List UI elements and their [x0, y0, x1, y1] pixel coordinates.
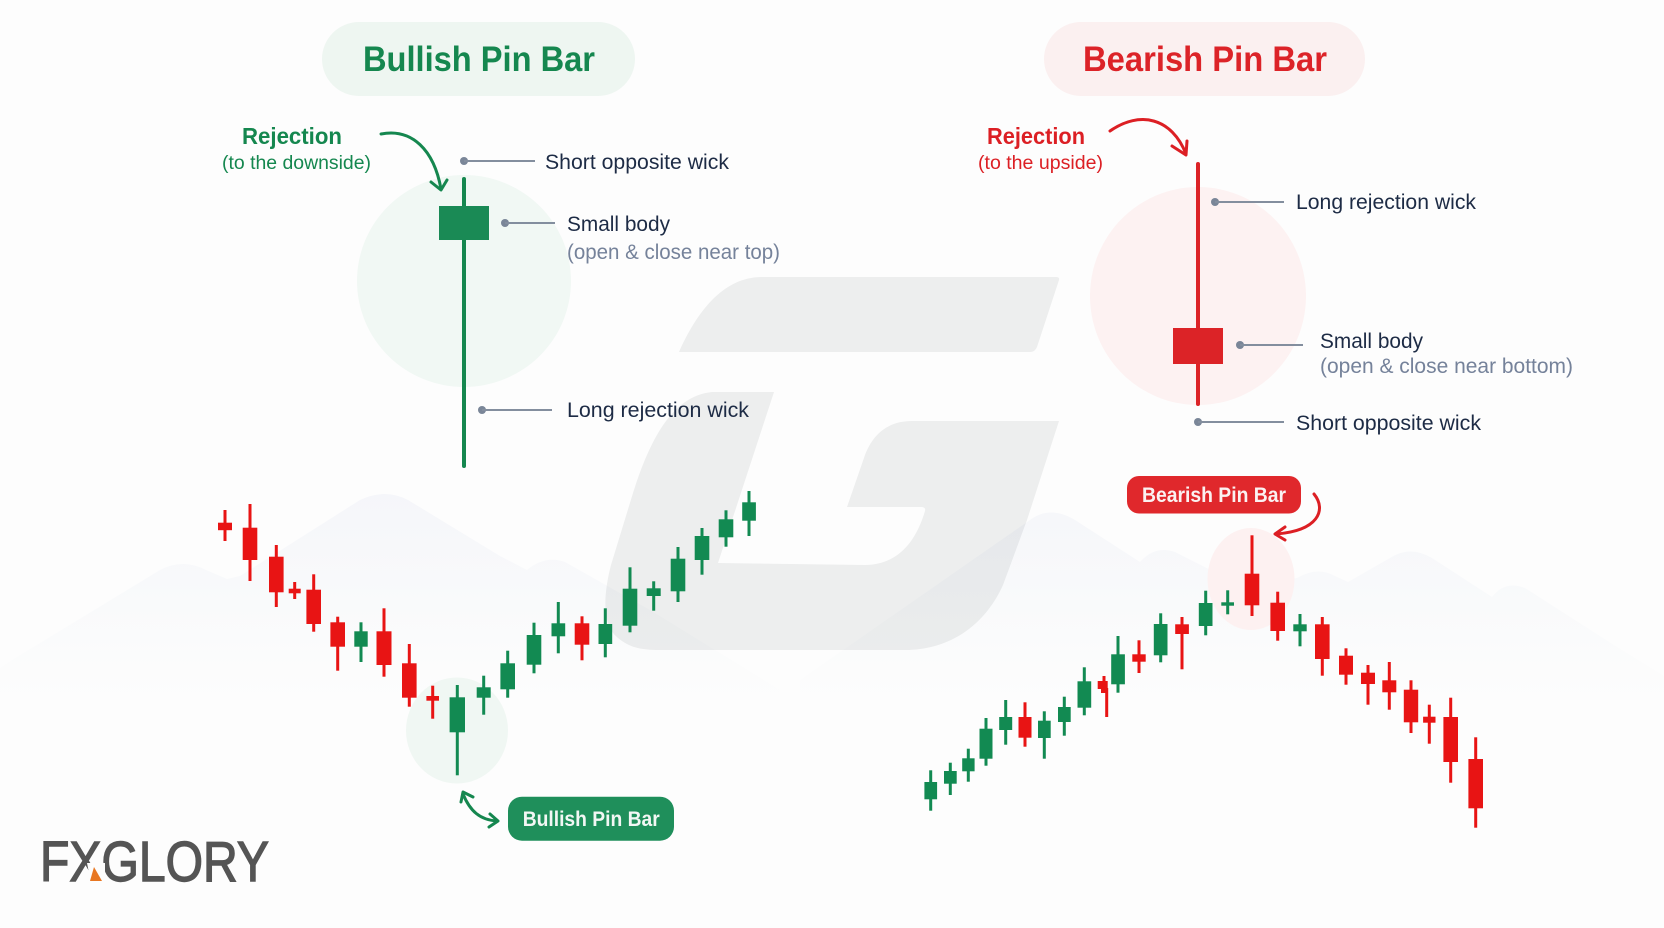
callout: long rejection wick: Long rejection wick: [567, 399, 750, 422]
candle: [924, 770, 937, 811]
candle: [1293, 614, 1307, 646]
rejection label: Rejection: [987, 123, 1085, 149]
candle: [477, 676, 491, 715]
candle: [1154, 613, 1168, 662]
chart: bearish reversal candlesticks: [924, 528, 1483, 828]
candle: [1339, 648, 1353, 685]
callout: small body: Small body: [567, 213, 670, 236]
candle: [376, 608, 392, 677]
candle: [330, 617, 345, 671]
candle: [1175, 617, 1189, 669]
rejection label: (to the upside): [978, 153, 1103, 174]
callout: short opposite wick: Short opposite wick: [545, 151, 730, 174]
candle: [1018, 702, 1032, 747]
logo: FXGLORY: FXGLORY: [40, 830, 269, 894]
candle: [1038, 711, 1051, 759]
rejection label: (to the downside): [222, 153, 371, 174]
rejection label: Rejection: [242, 123, 342, 149]
callout: small body: [1236, 330, 1573, 378]
callout: short opposite wick: Short opposite wick: [1296, 412, 1482, 435]
candle: [1468, 737, 1483, 828]
candle: [575, 616, 589, 660]
candle: [1058, 697, 1071, 736]
candle: [1315, 617, 1330, 676]
candle: [623, 567, 637, 632]
rejection label: [222, 123, 371, 174]
candle: [944, 763, 957, 795]
label: Bullish Pin Bar: [508, 797, 674, 841]
logo cut-out under accent: [87, 863, 105, 883]
candle: [719, 510, 733, 547]
candle: [1098, 676, 1108, 717]
callout: small body: [501, 213, 780, 264]
candle: [1132, 640, 1146, 673]
highlight circle: [1208, 528, 1294, 630]
candle: [354, 622, 368, 662]
candle: [1111, 636, 1125, 693]
candle: [1382, 662, 1396, 710]
callout: small body: (open & close near top): [567, 241, 780, 264]
candle: [552, 602, 565, 653]
bullish pin bar candle: [439, 177, 489, 468]
candle: [1361, 665, 1375, 705]
arrow: label to bearish pin bar: [1275, 494, 1320, 540]
bearish pin bar candle: [1173, 162, 1223, 406]
candle: [999, 700, 1012, 745]
candle: [742, 491, 756, 536]
candle: [1423, 705, 1436, 744]
candle: [1404, 680, 1418, 733]
candle: [1199, 591, 1212, 635]
callout: long rejection wick: Long rejection wick: [1296, 191, 1477, 214]
callout: short opposite wick: [1194, 412, 1482, 435]
panel: bearish pin bar anatomy: [978, 22, 1573, 435]
candle: [695, 528, 709, 575]
heading pill: Bearish Pin Bar: [1044, 22, 1365, 96]
icon: orange logo accent: [90, 867, 102, 881]
callout: long rejection wick: [1211, 191, 1477, 214]
heading pill: Bearish Pin Bar: Bearish Pin Bar: [1083, 40, 1327, 79]
panel: bullish pin bar anatomy: [222, 22, 780, 468]
arrow: rejection to the upside: [1110, 120, 1187, 155]
candle: [269, 545, 284, 607]
background mountains: [0, 494, 1664, 705]
callout: long rejection wick: [478, 399, 750, 422]
candle: [306, 574, 321, 632]
candle: [527, 623, 541, 673]
highlight circle: [357, 175, 571, 387]
candle: [243, 504, 257, 581]
highlight circle: [1090, 187, 1306, 405]
label: Bullish Pin Bar: Bullish Pin Bar: [523, 808, 660, 831]
candle: [671, 547, 685, 602]
heading pill: Bullish Pin Bar: Bullish Pin Bar: [363, 40, 595, 79]
candle: [980, 718, 992, 766]
candle: [402, 644, 417, 707]
arrow: label to bullish pin bar: [461, 792, 498, 827]
candle: bullish pin bar: [450, 685, 465, 775]
candle: bearish pin bar: [1245, 535, 1259, 616]
callout: small body: Small body: [1320, 330, 1423, 353]
candle: [598, 608, 612, 657]
label: Bearish Pin Bar: [1127, 476, 1301, 514]
candle: [1221, 590, 1234, 614]
candle: [426, 686, 439, 719]
chart: bullish reversal candlesticks: [218, 491, 756, 784]
candle: [1443, 698, 1458, 783]
callout: short opposite wick: [460, 151, 730, 174]
rejection label: [978, 123, 1103, 174]
candle: [647, 581, 661, 611]
watermark: G logo: [605, 277, 1059, 650]
candle: [289, 582, 301, 599]
candle: [1078, 667, 1091, 715]
candle: [962, 749, 975, 782]
candle: [500, 651, 515, 698]
arrow: rejection to the downside: [381, 133, 447, 190]
callout: small body: (open & close near bottom): [1320, 355, 1573, 378]
heading pill: Bullish Pin Bar: [322, 22, 635, 96]
highlight circle: [406, 678, 508, 784]
label: Bearish Pin Bar: Bearish Pin Bar: [1142, 484, 1286, 507]
candle: [1270, 592, 1285, 641]
candle: [218, 510, 232, 541]
